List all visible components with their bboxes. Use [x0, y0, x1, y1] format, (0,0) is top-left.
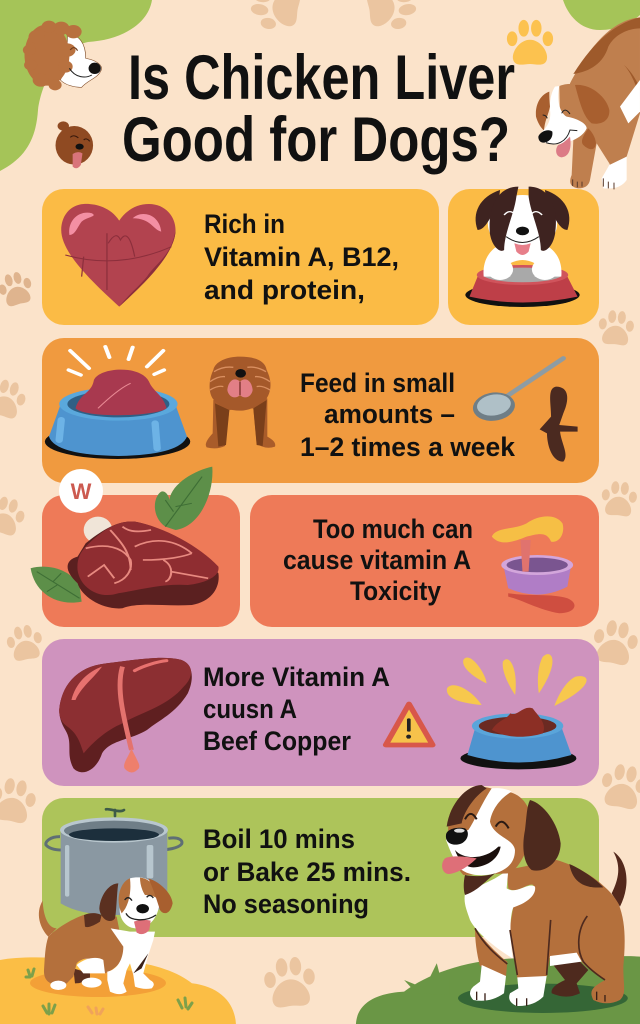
text: feed in small amounts: amounts – [324, 399, 455, 429]
title: Is Chicken Liver [128, 43, 515, 113]
text: feed in small amounts: 1–2 times a week [300, 432, 516, 462]
icon: puppy [39, 877, 173, 994]
icon: bowl with sparks [447, 654, 587, 769]
icon: liver heart [61, 204, 176, 307]
icon: liver steak with leaves [31, 467, 219, 608]
ground: yellow mound [0, 957, 236, 1024]
text: more vitamin A [203, 662, 390, 756]
ground: green hill [356, 956, 640, 1024]
title [122, 43, 515, 175]
icon: cooking pot [46, 809, 182, 915]
panel: dog at bowl [448, 187, 599, 325]
panel: rich in nutrients [42, 189, 439, 325]
text: too much can cause toxicity: cause vitamin A [283, 545, 471, 575]
text: boil or bake: Boil 10 mins [203, 824, 355, 854]
text: boil or bake: No seasoning [203, 889, 369, 919]
icon: warning triangle [386, 704, 433, 745]
icon: blue bowl of liver with rays [45, 347, 190, 459]
text: boil or bake [203, 824, 411, 919]
icon: yellow paw [507, 20, 553, 65]
text: boil or bake: or Bake 25 mins. [203, 857, 411, 887]
text: rich in vitamins [204, 209, 399, 305]
text: too much can cause toxicity [283, 514, 473, 606]
title: Good for Dogs? [122, 105, 510, 175]
icon: fluffy brown dog [206, 357, 275, 448]
text: rich in vitamins: Vitamin A, B12, [204, 242, 399, 272]
text: rich in vitamins: Rich in [204, 209, 285, 239]
green corner blob: top left [0, 0, 152, 171]
text: rich in vitamins: and protein, [204, 275, 365, 305]
text: feed in small amounts [300, 368, 516, 462]
icon: dark branch [540, 387, 578, 462]
icon: liver [59, 658, 192, 772]
text: too much can cause toxicity: Toxicity [350, 576, 441, 606]
icon: spoon [469, 358, 563, 425]
green corner blob: top right [563, 0, 640, 30]
icon: curly dog peeking [23, 21, 101, 90]
text: too much can cause toxicity: Too much can [313, 514, 473, 544]
badge: W [59, 469, 103, 513]
text: more vitamin A: cuusn A [203, 694, 297, 724]
panel: raw liver [31, 467, 240, 627]
text: more vitamin A: Beef Copper [203, 726, 351, 756]
panel: toxicity warning [250, 495, 599, 627]
icon: big happy dog [442, 785, 627, 1006]
ground: grass tufts [26, 969, 192, 1014]
icon: small round brown dog head [56, 121, 93, 168]
panel: vitamin A and copper [42, 639, 599, 786]
badge: W: W [71, 479, 92, 504]
icon: purple cup with yellow swirl [492, 516, 575, 613]
ground: orange shadow [30, 969, 166, 997]
text: feed in small amounts: Feed in small [300, 368, 455, 398]
text: more vitamin A: More Vitamin A [203, 662, 390, 692]
panel: cooking instructions [42, 798, 599, 937]
panel: feeding amounts [42, 338, 599, 483]
icon: dog in red bowl [465, 187, 580, 307]
icon: happy dog top right [536, 17, 640, 189]
